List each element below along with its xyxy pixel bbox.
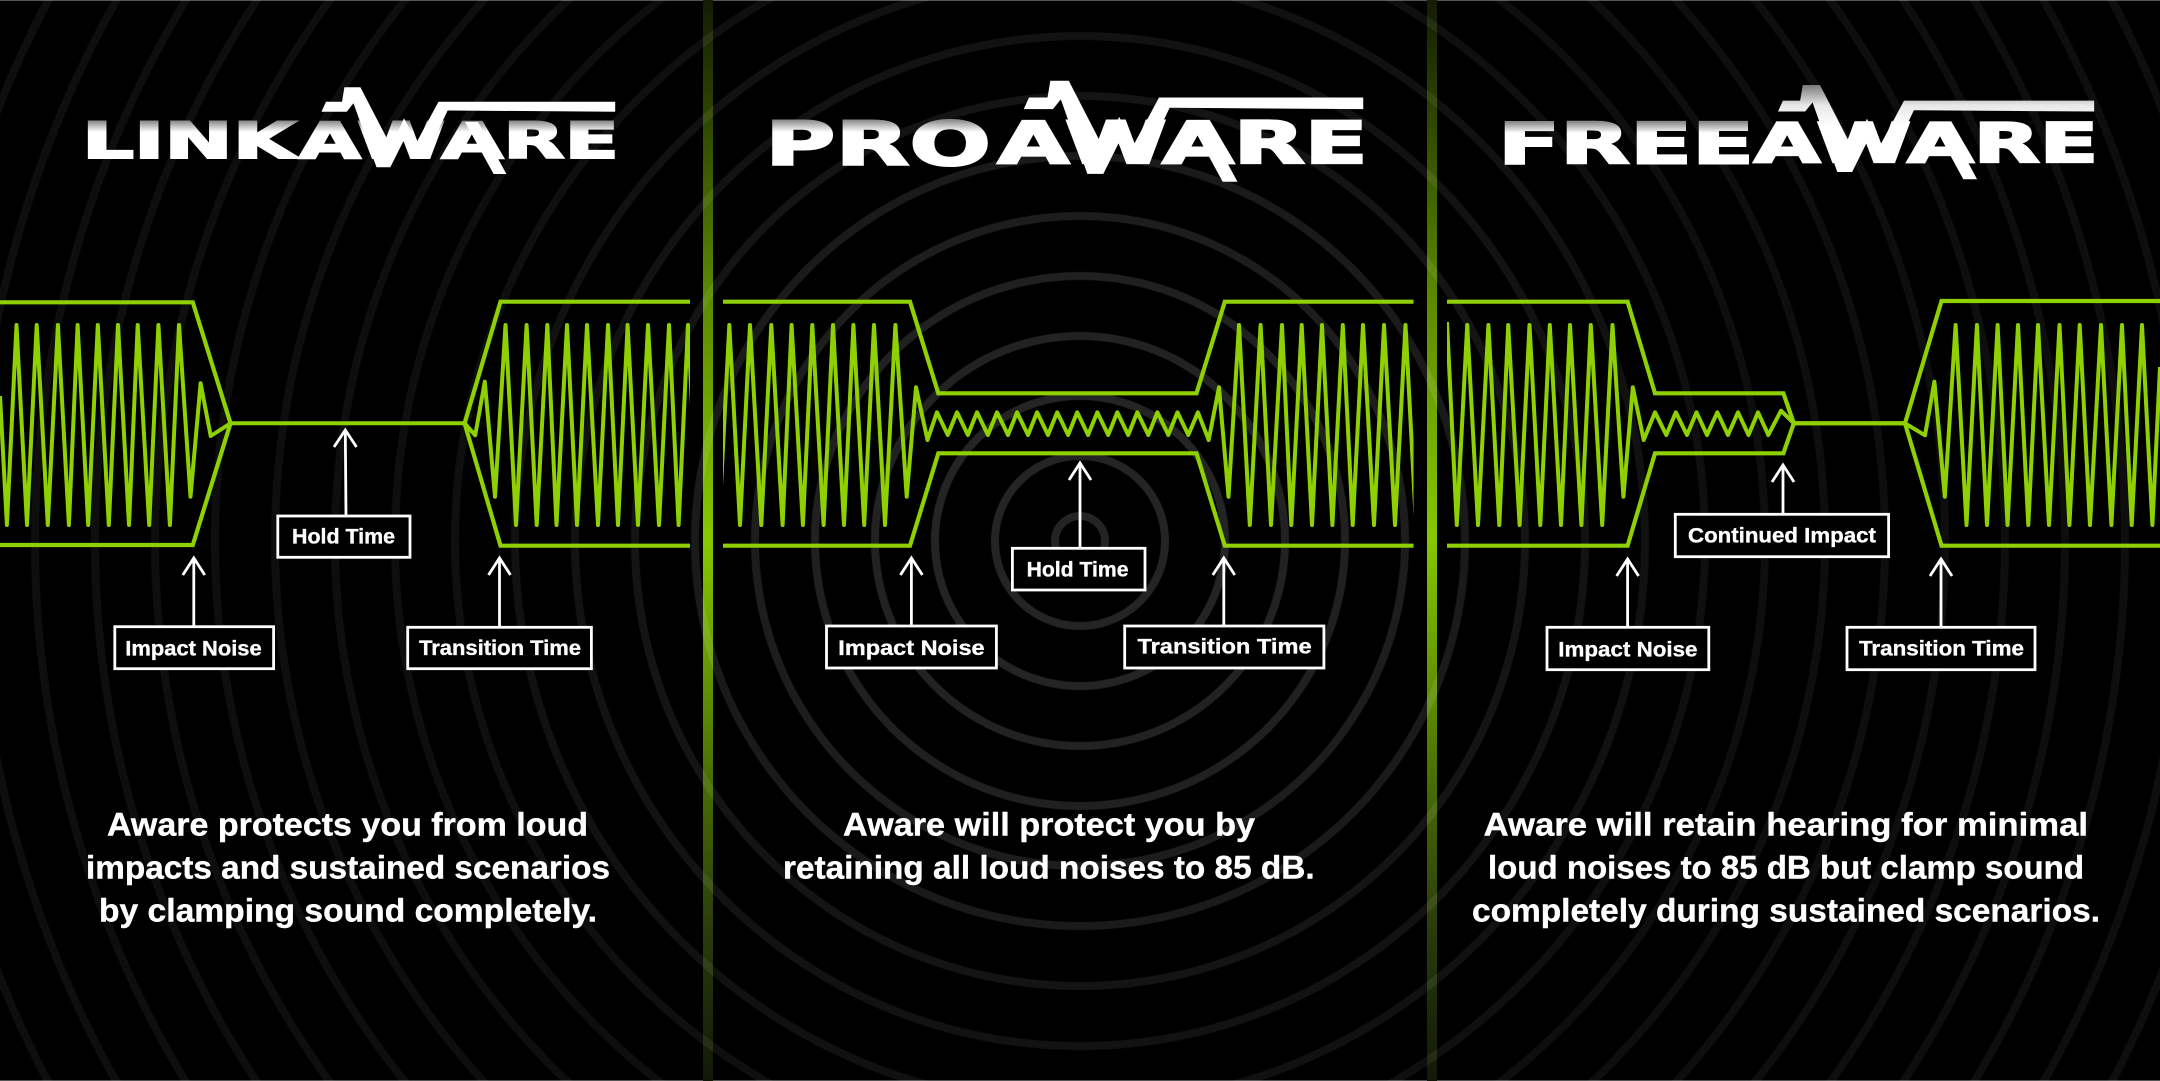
logo: FreeAware: FREE: [1498, 111, 1754, 177]
description: FreeAware: Aware will retain hearing for minimal: [1484, 806, 2088, 842]
label: Impact Noise: [826, 626, 996, 668]
description: LinkAware: [86, 806, 610, 928]
logo: ProAware: AWARE: [998, 109, 1368, 177]
divider: right: [1427, 0, 1436, 1081]
label: Impact Noise: [1547, 627, 1709, 670]
waveform diagram: retained to 85 dB: [719, 302, 1416, 546]
label: Transition Time: [408, 627, 591, 669]
label: Hold Time: [278, 516, 410, 557]
description: FreeAware: [1472, 806, 2100, 928]
label: Impact Noise: [115, 627, 274, 669]
top edge line: [0, 0, 2160, 1]
label: Transition Time: Transition Time: [1859, 638, 2024, 661]
description: LinkAware: impacts and sustained scenarios: [86, 850, 610, 886]
label: Transition Time: [1125, 626, 1324, 668]
arrow: impact noise: [900, 558, 922, 626]
panel: ProAware: [719, 81, 1416, 886]
label: Impact Noise: Impact Noise: [1558, 639, 1698, 662]
bottom edge line: [0, 1080, 2160, 1081]
label: Continued Impact: [1675, 514, 1889, 557]
description: LinkAware: Aware protects you from loud: [107, 806, 588, 842]
description: FreeAware: loud noises to 85 dB but clamp sound: [1488, 850, 2084, 886]
description: ProAware: retaining all loud noises to 85 dB.: [783, 850, 1315, 886]
arrow: impact noise: [1617, 559, 1639, 627]
description: FreeAware: completely during sustained scenarios.: [1472, 892, 2100, 928]
arrow: transition time: [1213, 558, 1235, 626]
description: LinkAware: by clamping sound completely.: [99, 892, 597, 928]
label: Transition Time: Transition Time: [419, 637, 581, 660]
waveform diagram: clamped completely: [0, 302, 698, 546]
description: ProAware: Aware will protect you by: [843, 806, 1255, 842]
logo: FreeAware: AWARE: [1754, 112, 2098, 175]
arrow: continued impact: [1772, 465, 1794, 514]
description: ProAware: [783, 806, 1315, 886]
label: Impact Noise: Impact Noise: [838, 637, 985, 660]
label: Impact Noise: Impact Noise: [125, 638, 262, 661]
waveform diagram: retained then clamped: [1447, 301, 2160, 546]
logo: LinkAware: AWARE: [299, 112, 619, 170]
logo: FreeAware: [1498, 85, 2098, 179]
arrow: transition time: [488, 558, 510, 627]
label: Hold Time: Hold Time: [1027, 559, 1128, 582]
arrow: hold time: [334, 430, 356, 516]
logo: LinkAware: LINK: [82, 112, 300, 170]
arrow: transition time: [1930, 559, 1952, 627]
label: Hold Time: [1012, 548, 1145, 590]
divider: left: [703, 0, 712, 1081]
label: Continued Impact: Continued Impact: [1688, 524, 1876, 547]
arrow: hold time: [1069, 463, 1091, 548]
label: Hold Time: Hold Time: [292, 525, 395, 548]
label: Transition Time: Transition Time: [1138, 635, 1312, 658]
panel: LinkAware: [0, 87, 698, 929]
logo: LinkAware: [82, 87, 619, 174]
label: Transition Time: [1847, 627, 2035, 670]
logo: ProAware: [765, 81, 1368, 182]
logo: ProAware: PRO: [765, 109, 991, 180]
panel: FreeAware: [1447, 85, 2160, 928]
arrow: impact noise: [183, 558, 205, 627]
